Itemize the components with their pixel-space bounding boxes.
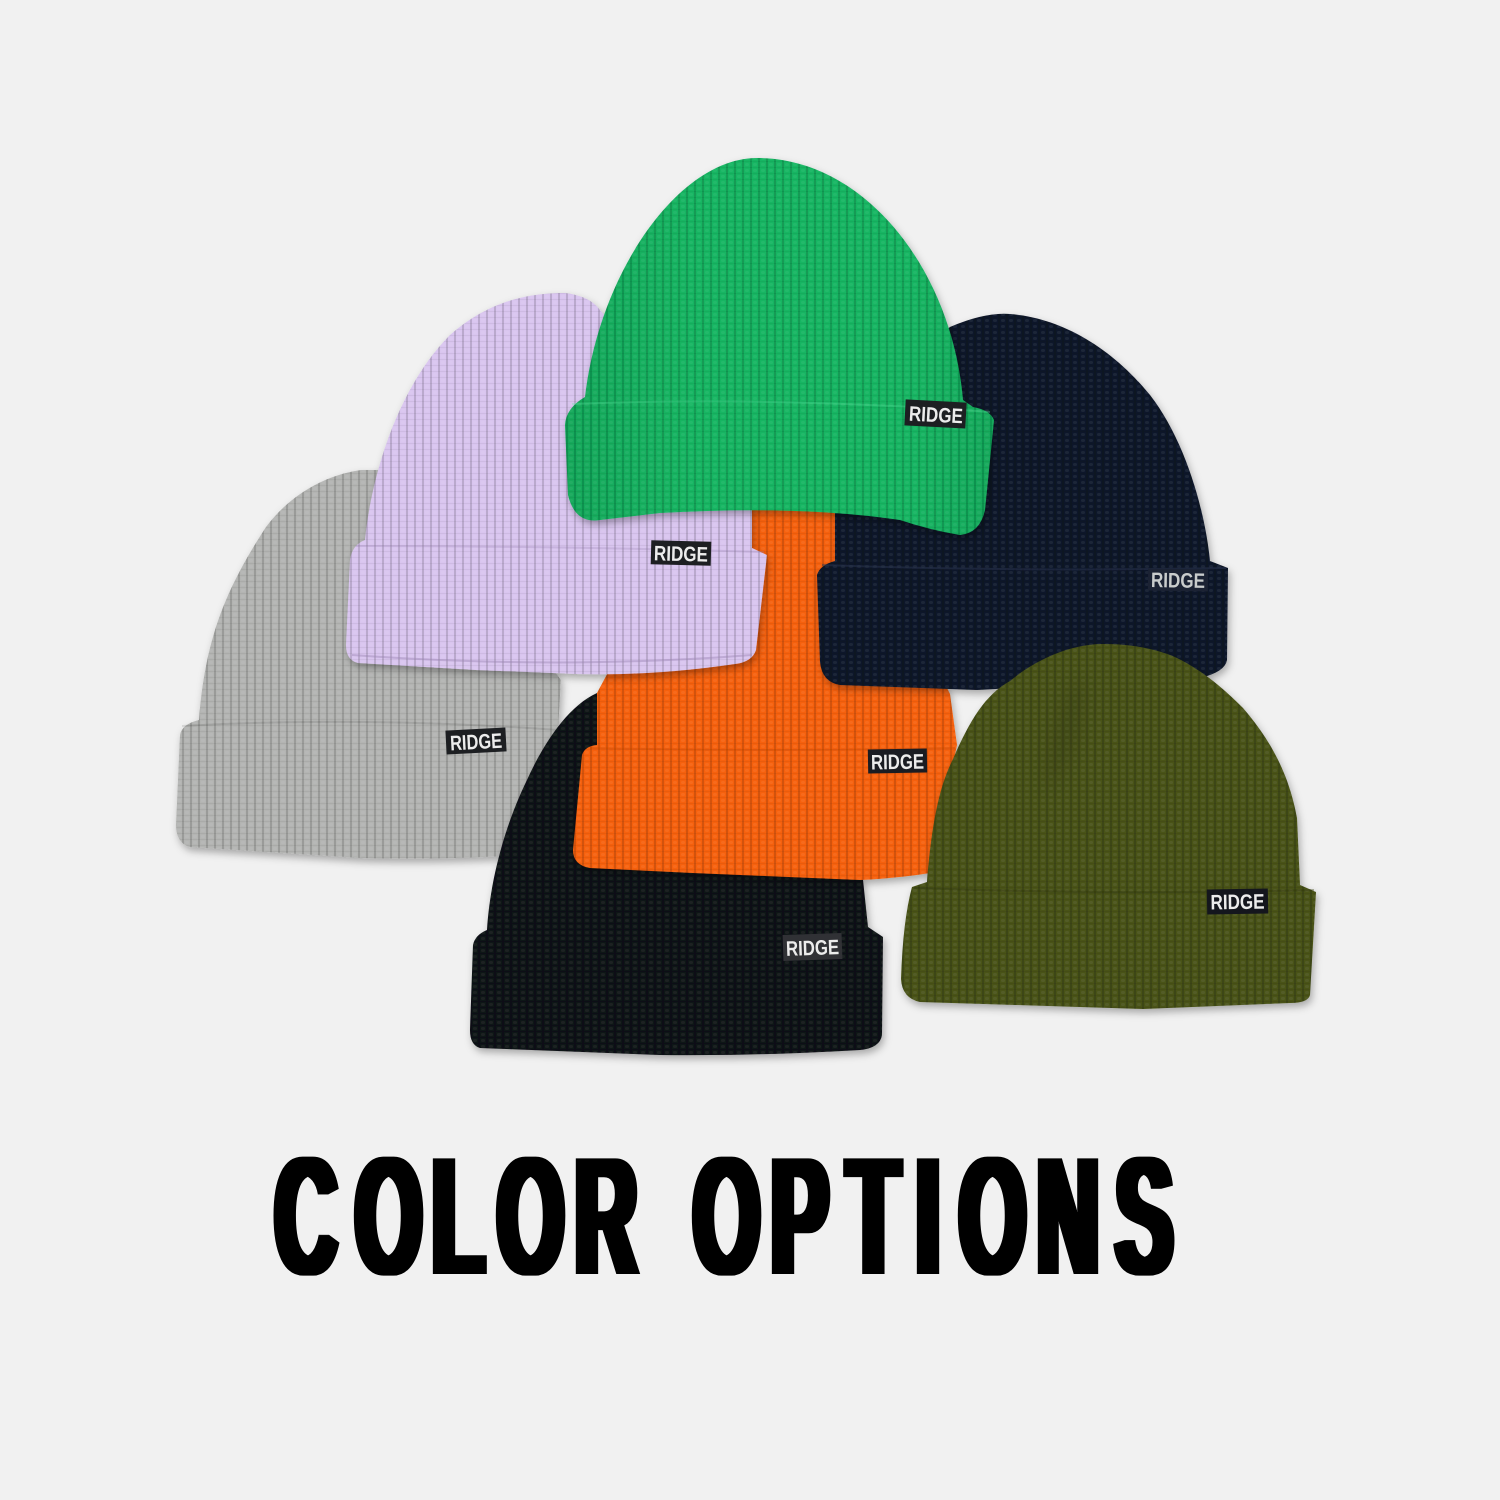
hat: green [565, 158, 994, 535]
hat: olive [901, 644, 1316, 1009]
label: green hat: RIDGE [908, 403, 963, 428]
label: black hat: RIDGE [786, 936, 839, 961]
hat: navy [817, 314, 1228, 690]
hat: orange [573, 490, 957, 880]
label: navy hat: RIDGE [1151, 569, 1205, 593]
title: COLOR OPTIONS [275, 1123, 1173, 1311]
hat: black [470, 693, 883, 1055]
label: orange hat: RIDGE [871, 751, 924, 774]
label: lilac hat: RIDGE [654, 542, 708, 567]
label: olive hat: RIDGE [1210, 891, 1265, 914]
hat: lilac [346, 293, 767, 674]
hat: heather gray [176, 470, 561, 859]
label: gray hat: RIDGE [450, 730, 503, 755]
